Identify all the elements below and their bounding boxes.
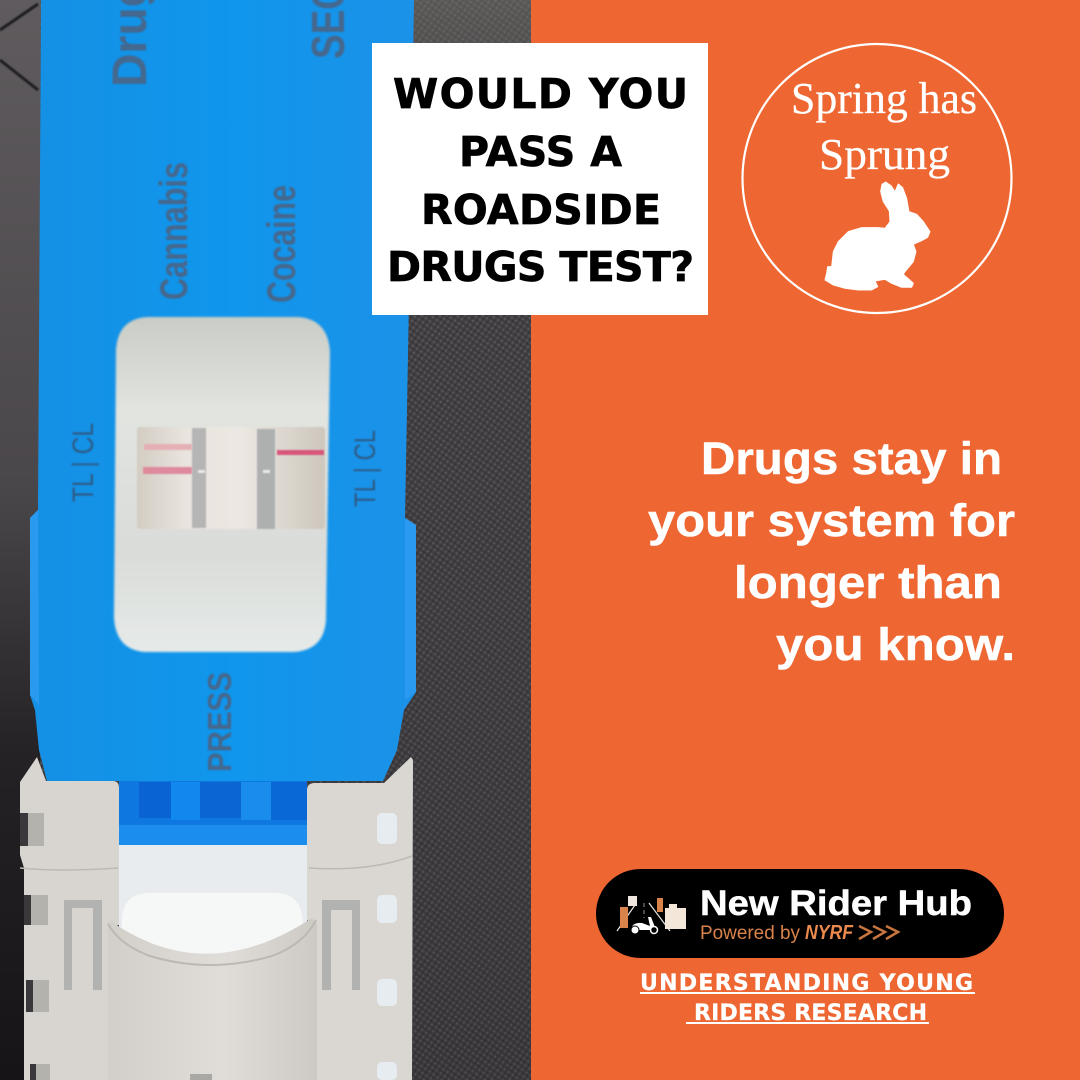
logo name: New Rider Hub [700,884,972,923]
badge text: Spring has [791,74,977,123]
icon: city road and scooter [617,896,686,934]
heading: would you pass a roadside drugs test: PASS A [459,128,622,176]
blue test cassette [30,0,416,781]
text block: drugs stay in your system: you know. [776,619,1015,670]
logo tagline: NYRF [805,922,854,944]
TL CL labels: TL | CL [67,423,100,502]
white collection pad [119,845,307,970]
text block: understanding young riders research: UNDERSTANDING YOUNG [640,971,973,996]
text block: drugs stay in your system: your system for [648,495,1015,546]
printed labels on the cassette [104,0,354,772]
logo: new rider hub [596,869,1004,958]
TL CL labels [67,423,382,507]
text block: understanding young riders research: RIDERS RESEARCH [694,1001,927,1026]
text block: drugs stay in your system [648,433,1015,670]
heading: would you pass a roadside drugs test: ROADSIDE [421,186,661,234]
text block: drugs stay in your system: Drugs stay in [701,433,1002,484]
grey housing: left grip [20,757,119,1080]
blue slider below cassette [119,781,307,845]
TL CL labels: TL | CL [349,430,382,507]
heading: would you pass a roadside drugs test: WOULD YOU [393,70,688,118]
logo tagline [700,922,854,944]
heading: would you pass a roadside drugs test [387,70,694,291]
result window [114,317,330,652]
grey housing: right grip [307,757,413,1080]
printed labels on the cassette: Cannabis [153,162,196,300]
icon: chevrons [859,926,898,939]
panel: title box [372,43,708,315]
icon: rabbit silhouette [825,182,930,290]
text block: drugs stay in your system: longer than [734,557,1002,608]
printed labels on the cassette: Cocaine [260,185,304,303]
fabric background [0,0,531,1080]
grey housing: centre cap [108,918,317,1080]
badge: spring has sprung [742,44,1012,313]
photo: drug test device on dark fabric [0,0,531,1080]
logo tagline: Powered by [700,923,800,944]
printed labels on the cassette: PRESS [201,672,238,772]
badge text [791,74,977,179]
text block: understanding young riders research [640,971,975,1026]
heading: would you pass a roadside drugs test: DRUGS TEST? [387,243,694,291]
panel: orange background [531,0,1080,1080]
badge text: Sprung [819,130,950,179]
positive and control test lines [143,444,324,474]
